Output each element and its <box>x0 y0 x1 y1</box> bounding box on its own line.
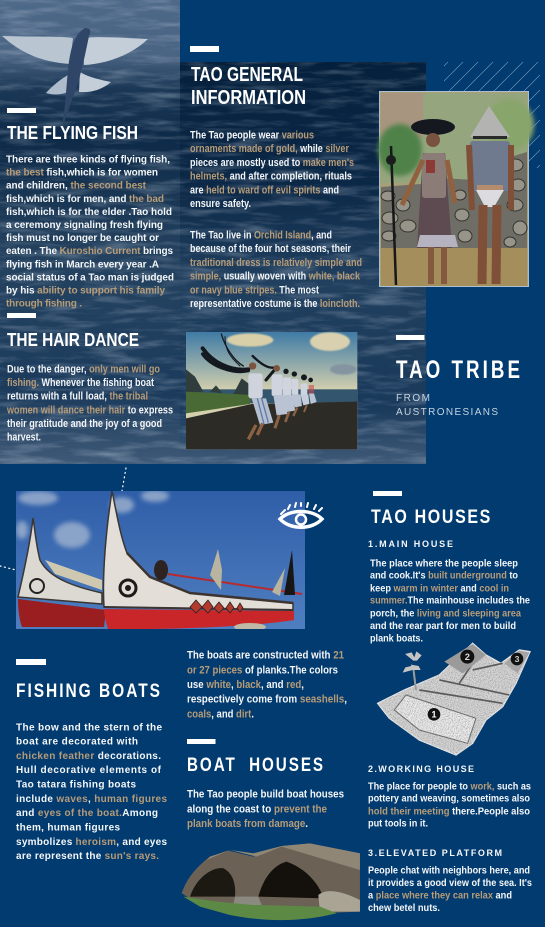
text: elevated platform: it provides a good view of the sea. It's <box>368 878 532 889</box>
text: flying fish: eaten . The Kuroshio Current brings <box>6 246 173 257</box>
subheading: elevated platform: 3.ELEVATED PLATFORM <box>368 848 502 858</box>
text: the hair dance <box>6 364 173 444</box>
text: boat construction: coals, and dirt. <box>187 708 254 720</box>
text: main house: plank boats. <box>370 634 423 644</box>
text: elevated platform: chew betel nuts. <box>368 903 440 914</box>
text: tao general information: representative costume is the loincloth. <box>190 298 360 310</box>
text: elevated platform <box>368 866 532 914</box>
text: fishing boats: The bow and the stern of the <box>16 722 162 734</box>
photo: boat house huts <box>182 843 360 920</box>
number markers: 2 <box>465 652 470 662</box>
text: working house: The place for people to work, such as <box>368 782 531 792</box>
text: the hair dance: fishing. Whenever the fishing boat <box>7 377 154 389</box>
text: fishing boats: boat are decorated with <box>16 737 138 748</box>
illustration: tao house map <box>376 640 533 757</box>
text: main house: porch, the living and sleeping area <box>370 608 521 620</box>
text: flying fish: fish,which is for the elder .Tao hold <box>6 207 172 218</box>
boat: front <box>103 491 302 629</box>
figure: man with silver helmet <box>469 106 511 284</box>
text: tao general information: pieces are mostly used to make men's <box>190 157 354 169</box>
boat: rear <box>18 518 106 627</box>
text: main house: and the rear part for men to build <box>370 621 516 632</box>
text: flying fish: and children, the second best <box>6 181 147 192</box>
text: flying fish <box>6 154 174 310</box>
text: main house: summer.The mainhouse includes the <box>370 596 530 606</box>
ocean photo panel <box>0 0 426 464</box>
text: fishing boats: are represent the sun's rays. <box>16 851 159 862</box>
text: main house: The place where the people sleep <box>370 558 518 570</box>
text: elevated platform: People chat with neighbors here, and <box>368 866 530 876</box>
text: tao general information: simple, usually woven with white, black <box>190 271 360 283</box>
photo: tao boats <box>16 490 305 631</box>
icon: flying fish <box>2 28 148 128</box>
title: tao tribe: FROM <box>396 393 430 404</box>
number markers: 1 <box>431 709 436 719</box>
number markers <box>428 650 523 721</box>
heading: the flying fish <box>7 108 138 143</box>
text: tao general information: or navy blue stripes. The most <box>190 284 319 296</box>
text: the hair dance: harvest. <box>7 432 41 444</box>
text: tao general information: traditional dress is relatively simple and <box>190 257 362 269</box>
text: the hair dance: their gratitude and the joy of a good <box>7 418 162 430</box>
heading: tao houses <box>371 491 492 528</box>
heading: boat houses: BOAT HOUSES <box>187 754 325 776</box>
photo: hair dance <box>186 332 357 449</box>
text: fishing boats: include waves, human figures <box>16 794 167 805</box>
figure: woman with hat <box>386 119 458 285</box>
dancers <box>203 334 317 439</box>
text: tao general information: because of the four hot seasons, their <box>190 243 351 255</box>
text: flying fish: flying fish in March every year .A <box>6 259 159 270</box>
heading: tao general information: TAO GENERAL <box>191 64 303 86</box>
heading: tao general information: INFORMATION <box>191 87 306 109</box>
heading: boat houses <box>187 739 325 776</box>
number markers: 3 <box>515 654 520 664</box>
dotted connectors <box>0 468 126 570</box>
text: flying fish: There are three kinds of flying fish, <box>6 154 170 166</box>
text: flying fish: through fishing . <box>6 299 82 310</box>
text: working house: hold their meeting there.People also <box>368 806 530 818</box>
text: working house: put tools in it. <box>368 818 428 830</box>
text: main house: and cook.It's built underground to <box>370 570 518 582</box>
photo: tao costume <box>378 92 534 286</box>
text: tao general information: ensure safety. <box>190 198 251 210</box>
text: boat construction: The boats are constructed with 21 <box>187 650 344 662</box>
text: fishing boats: chicken feather decorations. <box>16 751 161 762</box>
text: boat construction: respectively come from seashells, <box>187 694 347 706</box>
text: fishing boats: Hull decorative elements of <box>16 765 162 776</box>
hatch decoration <box>444 62 540 168</box>
text: fishing boats: Tao tatara fishing boats <box>16 780 136 790</box>
text: flying fish: the best fish,which is for women <box>6 168 158 179</box>
text: boat construction <box>187 650 347 720</box>
text: working house: pottery and weaving, sometimes also <box>368 794 530 804</box>
text: boat houses <box>187 788 344 830</box>
text: boat construction: use white, black, and red, <box>187 679 304 691</box>
text: fishing boats: them, human figures <box>16 822 120 834</box>
icon: eye <box>280 503 322 527</box>
heading: tao houses: TAO HOUSES <box>371 506 492 528</box>
heading: the hair dance <box>7 313 139 350</box>
text: flying fish: fish,which is for men, and the bad <box>6 194 164 205</box>
text: boat houses: along the coast to prevent the <box>187 804 327 816</box>
text: flying fish: by his ability to support his family <box>6 286 165 296</box>
text: fishing boats: and eyes of the boat.Among <box>16 808 158 819</box>
title: tao tribe: AUSTRONESIANS <box>396 407 498 418</box>
text: boat construction: or 27 pieces of planks.The colors <box>187 664 338 676</box>
text: boat houses: plank boats from damage. <box>187 818 308 830</box>
text: flying fish: social status of a Tao man is judged <box>6 272 174 283</box>
subheading: main house: 1.MAIN HOUSE <box>368 539 453 549</box>
text: tao general information: helmets, and after completion, rituals <box>190 171 352 183</box>
text: fishing boats: symbolizes heroism, and eyes <box>16 837 167 848</box>
text: the hair dance: women will dance their hair to express <box>6 404 173 416</box>
text: main house: keep warm in winter and cool in <box>370 584 509 594</box>
text: working house <box>368 782 531 830</box>
text: the hair dance: Due to the danger, only men will go <box>7 364 160 376</box>
text: tao general information <box>190 130 362 310</box>
title: tao tribe <box>396 335 523 418</box>
heading: the hair dance: THE HAIR DANCE <box>7 329 139 350</box>
heading: the flying fish: THE FLYING FISH <box>7 123 138 143</box>
text: tao general information: ornaments made of gold, while silver <box>190 143 349 155</box>
text: tao general information: are held to ward off evil spirits and <box>190 184 339 196</box>
text: tao general information: The Tao people wear various <box>190 130 314 142</box>
heading: tao general information <box>190 46 306 109</box>
heading: fishing boats: FISHING BOATS <box>16 680 162 702</box>
text: tao general information: The Tao live in Orchid Island, and <box>190 230 332 242</box>
text: flying fish: a ceremony signaling fresh flying <box>6 220 163 231</box>
text: main house <box>370 558 530 644</box>
text: boat houses: The Tao people build boat houses <box>187 788 344 800</box>
text: flying fish: fish must no longer be caught or <box>6 233 159 244</box>
text: fishing boats <box>16 722 167 862</box>
text: elevated platform: a place where they can relax and <box>368 890 512 902</box>
heading: fishing boats <box>16 659 162 702</box>
text: the hair dance: returns with a full load, the tribal <box>7 390 148 402</box>
subheading: working house: 2.WORKING HOUSE <box>368 764 474 774</box>
